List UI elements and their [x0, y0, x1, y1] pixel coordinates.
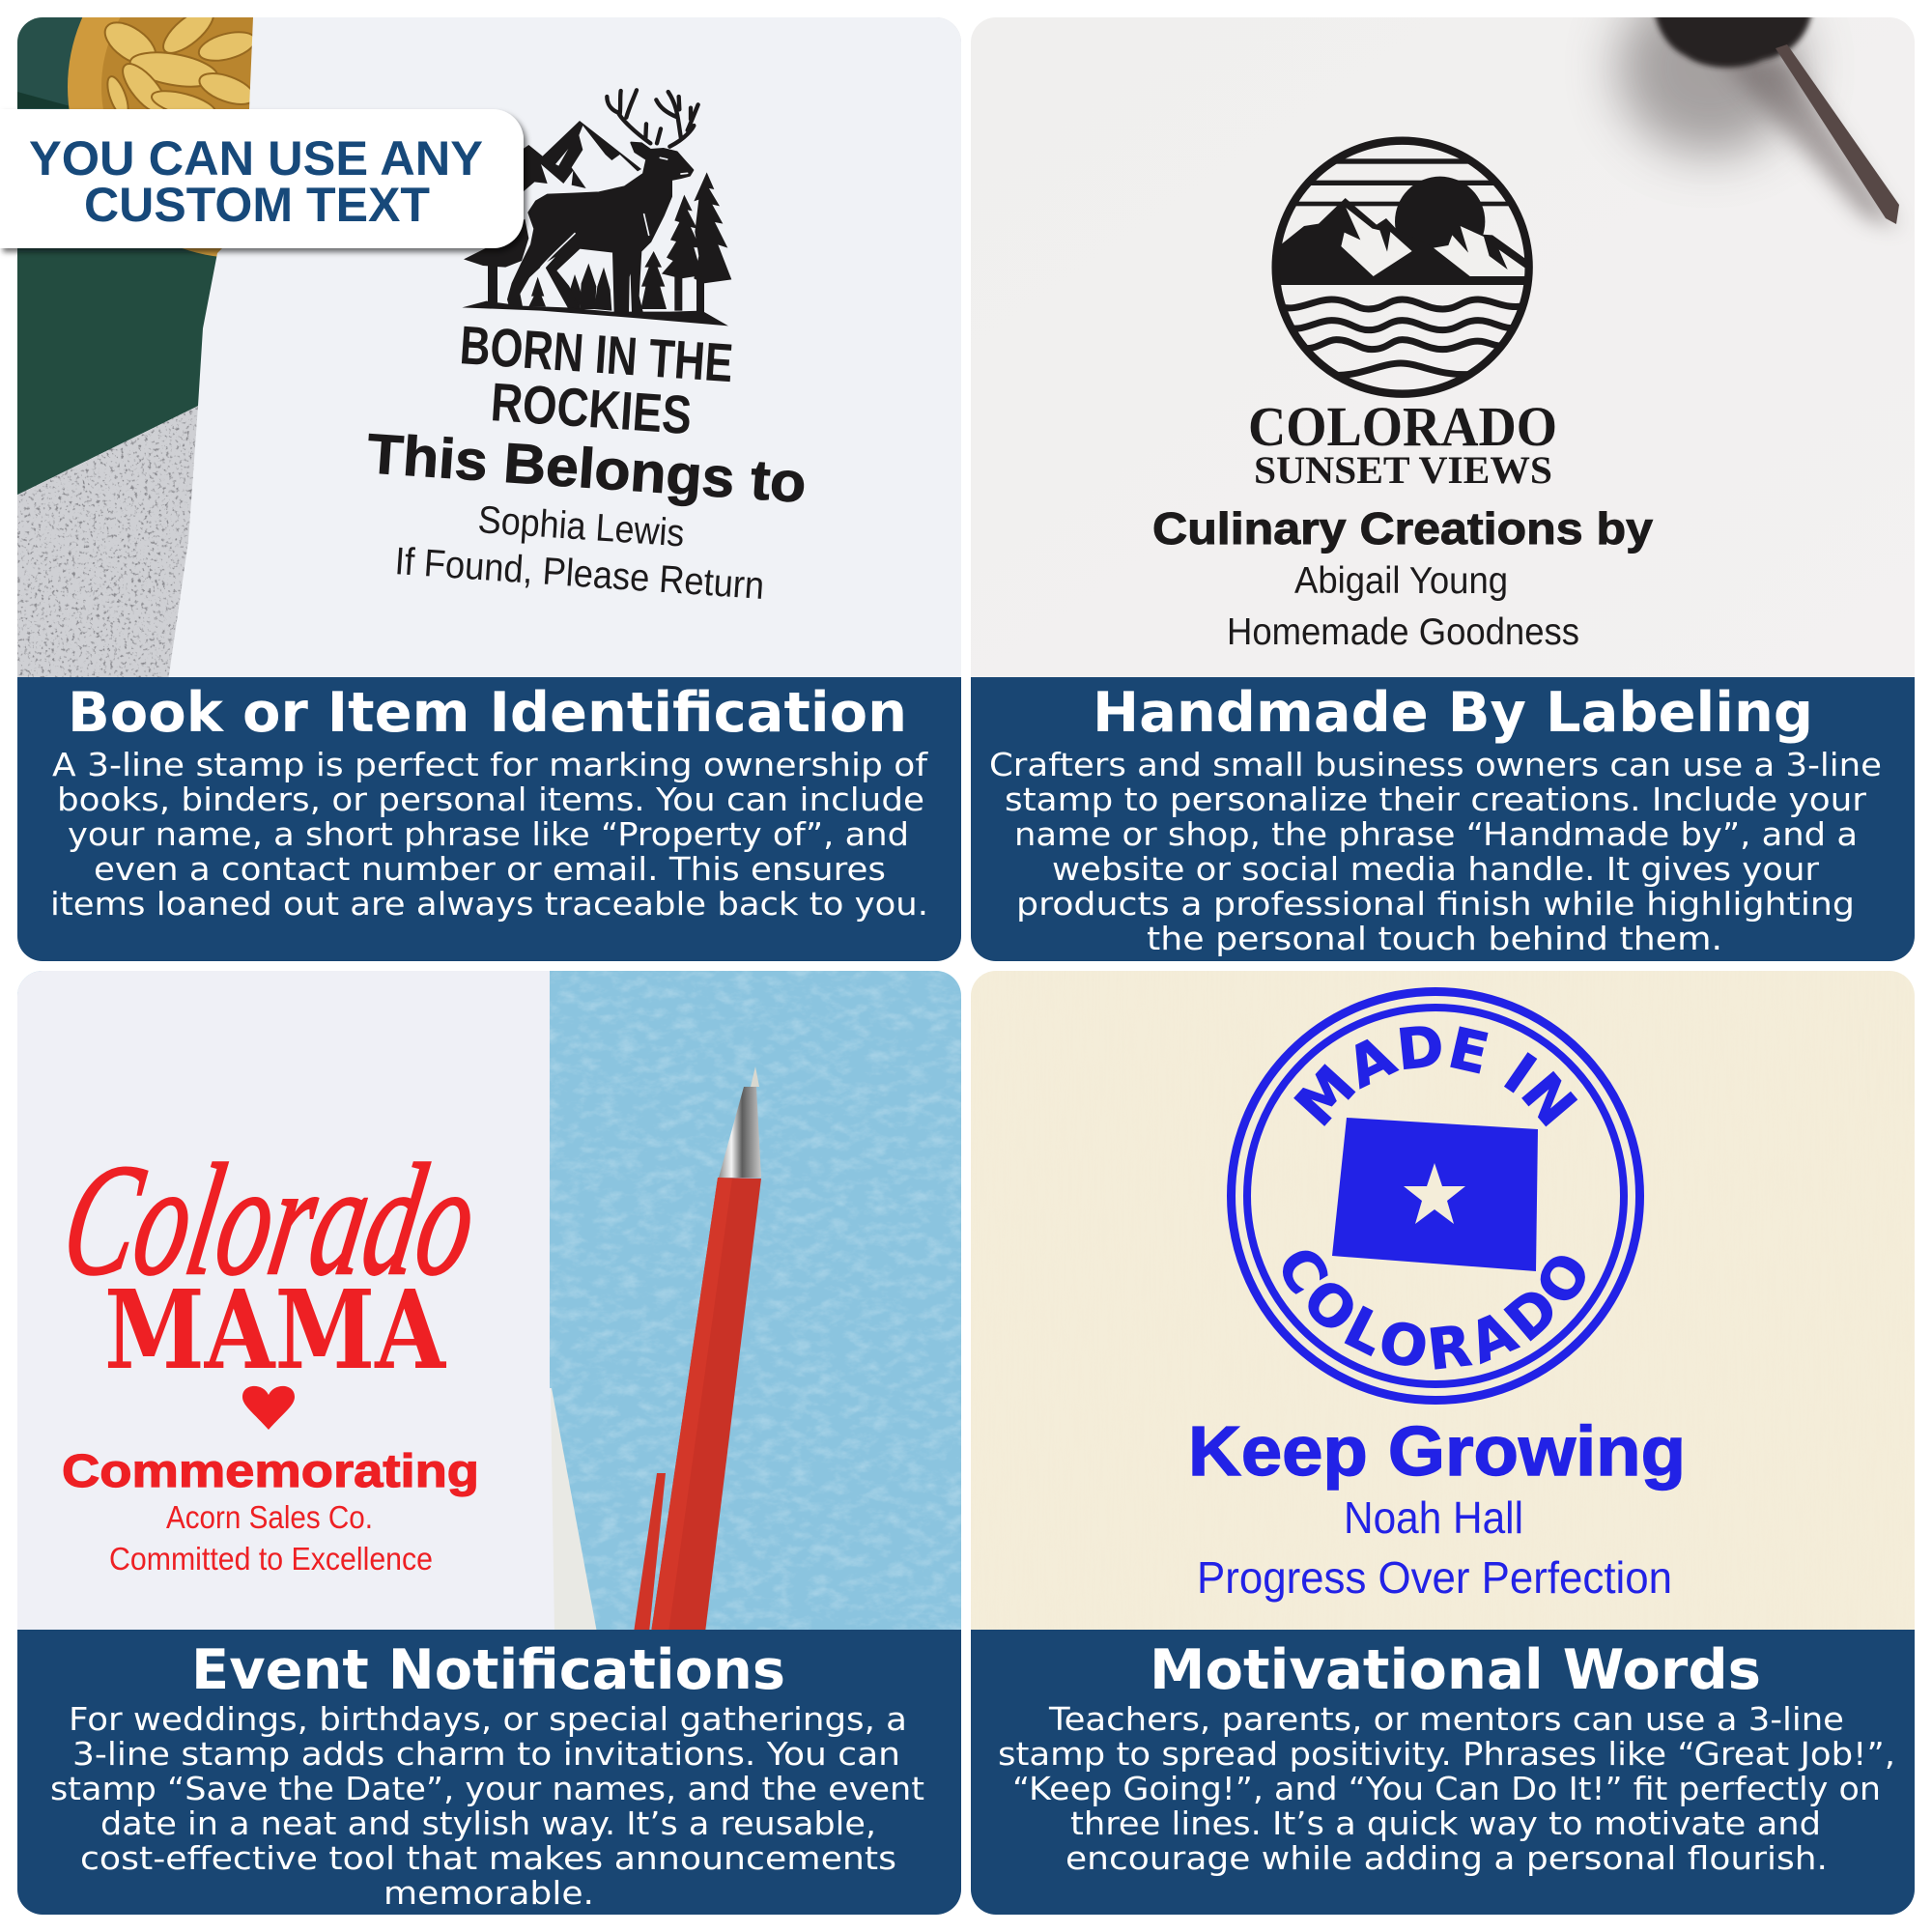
- heading: Event Notifications: [191, 1638, 785, 1702]
- body text: name or shop, the phrase “Handmade by”, and a: [1014, 815, 1858, 853]
- photo: paper card on blue surface with red pen: [17, 971, 961, 1637]
- body text: encourage while adding a personal flourish.: [1065, 1839, 1828, 1877]
- stamp logo: made in colorado seal: MADE IN: [1293, 1026, 1578, 1126]
- stamp text: born in the rockies: ROCKIES: [489, 371, 694, 445]
- stamp text: colorado sunset views: Abigail Young: [1294, 560, 1508, 602]
- stamp logo: made in colorado seal: COLORADO: [1283, 1250, 1585, 1370]
- stamp text: keep growing: [1188, 1413, 1686, 1603]
- body text: [50, 1700, 924, 1912]
- body text: [998, 1700, 1895, 1877]
- body text: Teachers, parents, or mentors can use a 3-line: [1048, 1700, 1844, 1738]
- photo: cream textured paper: [971, 971, 1915, 1637]
- callout: you can use any custom text: CUSTOM TEXT: [84, 178, 430, 232]
- body text: stamp “Save the Date”, your names, and the event: [50, 1770, 924, 1807]
- stamp text: colorado mama: MAMA: [104, 1267, 447, 1394]
- caption band: book or item identification: [17, 677, 961, 961]
- body text: items loaned out are always traceable back to you.: [50, 885, 928, 923]
- stamp text: colorado mama: Commemorating: [62, 1446, 479, 1497]
- panel: handmade by labeling: [971, 0, 1915, 961]
- photo: white paper with stamp pin: [971, 0, 1915, 684]
- body text: [989, 746, 1882, 957]
- body text: Crafters and small business owners can use a 3-line: [989, 746, 1882, 783]
- stamp text: colorado sunset views: Culinary Creations by: [1152, 503, 1653, 554]
- callout: you can use any custom text: YOU CAN USE ANY: [29, 131, 483, 185]
- stamp text: born in the rockies: Sophia Lewis: [476, 498, 686, 555]
- body text: website or social media handle. It gives your: [1052, 850, 1819, 888]
- heading: Handmade By Labeling: [1093, 681, 1813, 745]
- photo: torn paper on green envelope with gold seal: [17, 0, 961, 684]
- stamp text: colorado mama: Committed to Excellence: [109, 1541, 433, 1577]
- callout: you can use any custom text: [0, 109, 524, 248]
- stamp text: colorado sunset views: [1152, 395, 1653, 653]
- stamp text: born in the rockies: BORN IN THE: [458, 314, 735, 393]
- body text: your name, a short phrase like “Property of”, and: [68, 815, 909, 853]
- right pines: [640, 172, 731, 316]
- body text: A 3-line stamp is perfect for marking ownership of: [52, 746, 929, 783]
- body text: 3-line stamp adds charm to invitations. You can: [72, 1735, 900, 1773]
- stamp text: colorado mama: Colorado: [52, 1131, 489, 1308]
- caption band: handmade by labeling: [971, 677, 1915, 961]
- panel: book or item identification: [17, 0, 961, 961]
- stamp text: colorado mama: Acorn Sales Co.: [166, 1499, 373, 1535]
- body text: books, binders, or personal items. You can include: [57, 781, 924, 818]
- stamp text: born in the rockies: This Belongs to: [365, 422, 808, 515]
- stag highlights: [541, 157, 688, 268]
- body text: products a professional finish while highlighting: [1016, 885, 1855, 923]
- body text: cost-effective tool that makes announcements: [80, 1839, 896, 1877]
- body text: three lines. It’s a quick way to motivate and: [1070, 1804, 1821, 1842]
- small pines: [528, 264, 611, 311]
- heading: Motivational Words: [1150, 1638, 1761, 1702]
- antlers: [607, 90, 698, 147]
- body text: date in a neat and stylish way. It’s a reusable,: [100, 1804, 876, 1842]
- left pine: [464, 219, 528, 302]
- stamp text: keep growing: Progress Over Perfection: [1197, 1552, 1672, 1603]
- stamp text: colorado sunset views: Homemade Goodness: [1227, 611, 1579, 653]
- stamp logo: made in colorado seal: [1227, 987, 1644, 1405]
- stamp text: colorado sunset views: SUNSET VIEWS: [1254, 448, 1552, 492]
- panel: motivational words: [971, 971, 1915, 1915]
- stamp text: keep growing: Noah Hall: [1344, 1492, 1523, 1543]
- panel: event notifications: [17, 971, 961, 1915]
- mountains: [524, 121, 641, 191]
- stamp text: born in the rockies: [365, 314, 808, 608]
- body text: For weddings, birthdays, or special gatherings, a: [69, 1700, 907, 1738]
- red pen: [634, 1066, 761, 1633]
- heading: Book or Item Identification: [68, 681, 907, 745]
- stamp text: colorado sunset views: COLORADO: [1248, 395, 1557, 458]
- body text: “Keep Going!”, and “You Can Do It!” fit perfectly on: [1012, 1770, 1881, 1807]
- illustration: stag, mountains and pines: [462, 90, 731, 326]
- caption band: motivational words: [971, 1630, 1915, 1915]
- stamp logo: mountains, sun and waves roundel: [1268, 141, 1536, 394]
- stamp text: keep growing: Keep Growing: [1188, 1413, 1686, 1491]
- icon: heart: [242, 1386, 295, 1430]
- body text: the personal touch behind them.: [1147, 920, 1722, 957]
- body text: memorable.: [384, 1874, 594, 1912]
- stag body: [508, 143, 693, 317]
- stamp text: born in the rockies: If Found, Please Return: [393, 540, 765, 608]
- ground: [462, 301, 728, 326]
- body text: even a contact number or email. This ensures: [94, 850, 886, 888]
- stamp text: colorado mama: [64, 1161, 476, 1571]
- body text: stamp to personalize their creations. Include your: [1005, 781, 1866, 818]
- icon: colorado state with star: [1332, 1118, 1538, 1271]
- body text: [50, 746, 929, 923]
- caption band: event notifications: [17, 1630, 961, 1915]
- body text: stamp to spread positivity. Phrases like “Great Job!”,: [998, 1735, 1895, 1773]
